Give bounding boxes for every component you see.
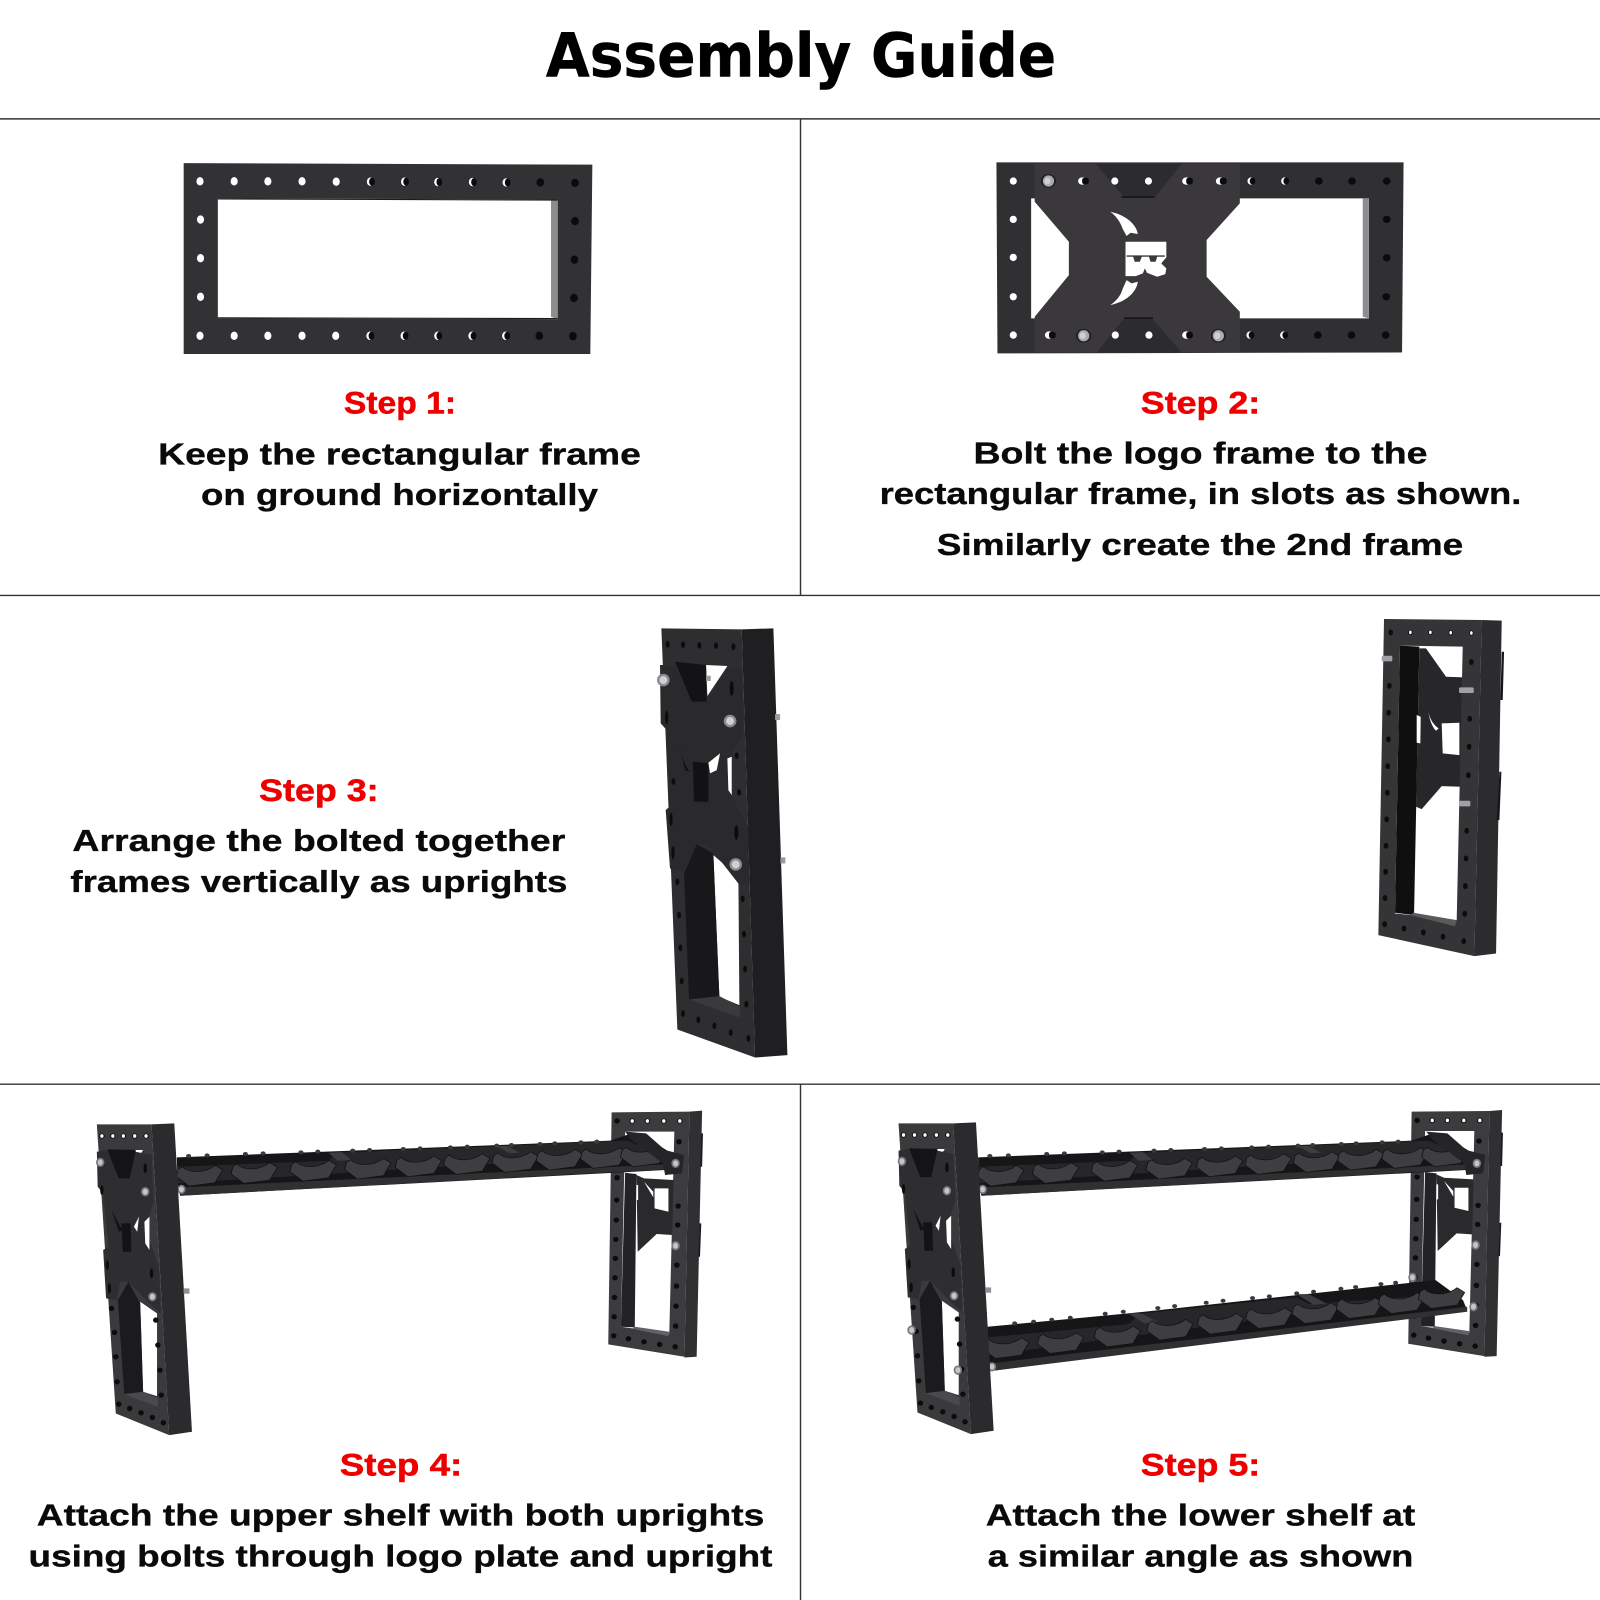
- step 5 description: [986, 1499, 1415, 1573]
- title: Assembly Guide: [546, 22, 1056, 92]
- panel: step 4: [29, 1111, 772, 1573]
- step 5 label: Step 5:: [1141, 1447, 1260, 1483]
- step 4 description: [29, 1499, 772, 1573]
- step 2 label: Step 2:: [1141, 384, 1260, 420]
- panel: step 2: [880, 162, 1521, 562]
- panel: step 5: [898, 1110, 1503, 1573]
- step 2 description: Similarly create the 2nd frame: [937, 528, 1463, 562]
- rack with upper shelf: [96, 1111, 703, 1435]
- lower shelf: [941, 1273, 1478, 1371]
- step 2 description: rectangular frame, in slots as shown.: [880, 477, 1521, 511]
- step 5 description: a similar angle as shown: [988, 1539, 1413, 1573]
- panel: step 3: [70, 619, 1504, 1058]
- step 3 description: [70, 824, 567, 899]
- step 3 description: frames vertically as uprights: [70, 865, 567, 899]
- step 4 description: using bolts through logo plate and upright: [29, 1539, 772, 1573]
- step 1 description: Keep the rectangular frame: [158, 437, 641, 471]
- rectangular frame: [184, 163, 592, 354]
- rack with upper and lower shelves: [898, 1110, 1503, 1434]
- step 4 label: Step 4:: [340, 1447, 462, 1483]
- step 3 description: Arrange the bolted together: [72, 824, 565, 858]
- logo: [1110, 212, 1166, 305]
- step 4 description: Attach the upper shelf with both uprights: [37, 1499, 764, 1533]
- step 2 description: Bolt the logo frame to the: [973, 436, 1428, 470]
- step 1 description: on ground horizontally: [201, 478, 598, 512]
- frame with logo plate: [996, 162, 1404, 353]
- bolts: [1041, 174, 1226, 343]
- step 5 description: Attach the lower shelf at: [986, 1499, 1415, 1533]
- step 1 description: [158, 437, 641, 512]
- step 1 label: Step 1:: [344, 384, 456, 420]
- upright rear view: [1378, 619, 1504, 956]
- step 3 label: Step 3:: [259, 772, 379, 808]
- panel: step 1: [158, 163, 641, 512]
- upright front view: [657, 628, 787, 1058]
- step 2 description: [880, 436, 1521, 562]
